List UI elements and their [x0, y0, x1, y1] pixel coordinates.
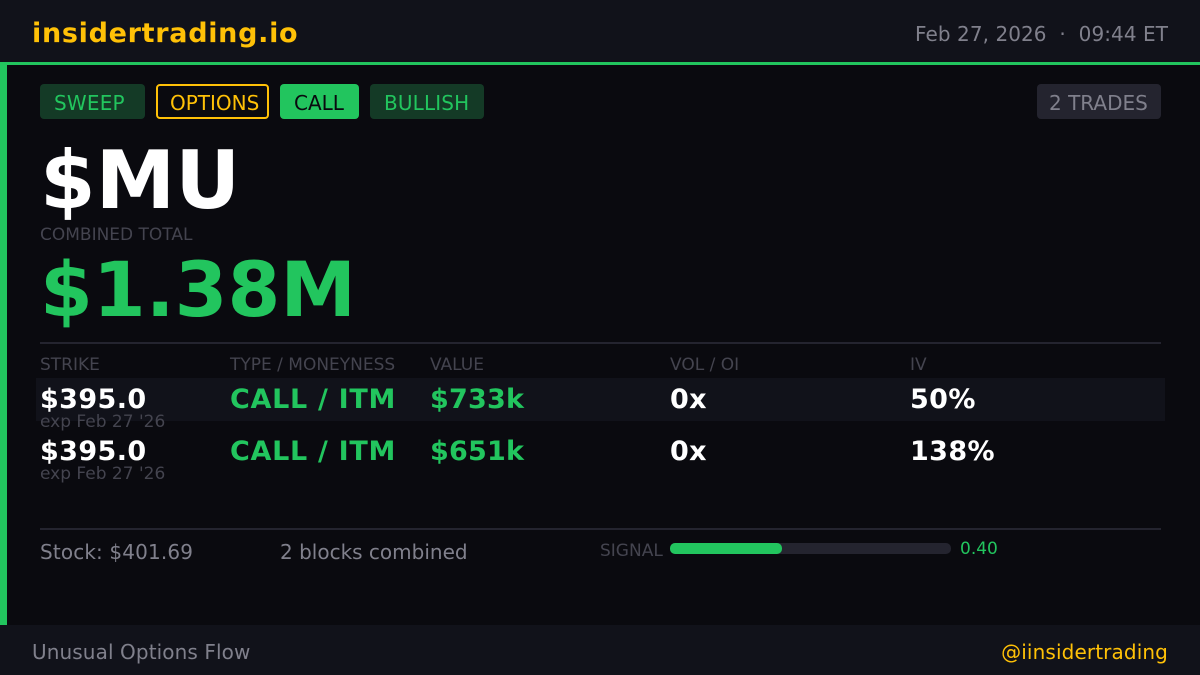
combined total value: $1.38M — [40, 245, 356, 334]
ticker: $MU — [40, 134, 240, 227]
table row 1 — [40, 384, 976, 432]
trade count badge — [1037, 84, 1161, 119]
table row 1: $733k — [430, 384, 524, 415]
stock price: Stock: $401.69 — [40, 540, 193, 564]
signal bar — [670, 543, 951, 554]
table row 2 — [40, 436, 995, 484]
table row 2: 0x — [670, 436, 707, 467]
tag: bullish — [370, 84, 484, 119]
table row 1: $395.0 — [40, 384, 147, 415]
table row 1: CALL / ITM — [230, 384, 396, 415]
footer bar — [0, 625, 1200, 675]
tag: call — [280, 84, 359, 119]
tag: options — [156, 84, 269, 119]
combined total label: COMBINED TOTAL — [40, 225, 192, 245]
header bar — [0, 0, 1200, 65]
tag: call: CALL — [294, 91, 344, 115]
tag: sweep: SWEEP — [54, 91, 125, 115]
row 1 highlight — [36, 378, 1165, 421]
table row 2: $395.0 — [40, 436, 147, 467]
tag: options: OPTIONS — [170, 91, 259, 115]
table header: IV — [910, 355, 927, 375]
table header: VOL / OI — [670, 355, 739, 375]
signal value: 0.40 — [960, 539, 998, 559]
table header — [40, 355, 927, 375]
table row 1: exp Feb 27 '26 — [40, 412, 165, 432]
table header: STRIKE — [40, 355, 100, 375]
brand name: insidertrading.io — [32, 18, 298, 49]
table header: TYPE / MONEYNESS — [230, 355, 395, 375]
blocks combined: 2 blocks combined — [280, 540, 468, 564]
table header: VALUE — [430, 355, 484, 375]
divider — [40, 342, 1161, 344]
table row 1: 0x — [670, 384, 707, 415]
table row 2: $651k — [430, 436, 524, 467]
signal label: SIGNAL — [600, 541, 663, 561]
date and time: Feb 27, 2026 · 09:44 ET — [915, 22, 1168, 46]
table row 2: 138% — [910, 436, 995, 467]
tag: bullish: BULLISH — [384, 91, 469, 115]
left accent bar — [0, 65, 7, 625]
divider — [40, 528, 1161, 530]
trade count badge: 2 TRADES — [1049, 91, 1148, 115]
tag: sweep — [40, 84, 145, 119]
table row 2: exp Feb 27 '26 — [40, 464, 165, 484]
signal fill — [670, 543, 782, 554]
table row 2: CALL / ITM — [230, 436, 396, 467]
table row 1: 50% — [910, 384, 976, 415]
footer label: Unusual Options Flow — [32, 640, 250, 664]
footer handle: @iinsidertrading — [1001, 640, 1168, 664]
